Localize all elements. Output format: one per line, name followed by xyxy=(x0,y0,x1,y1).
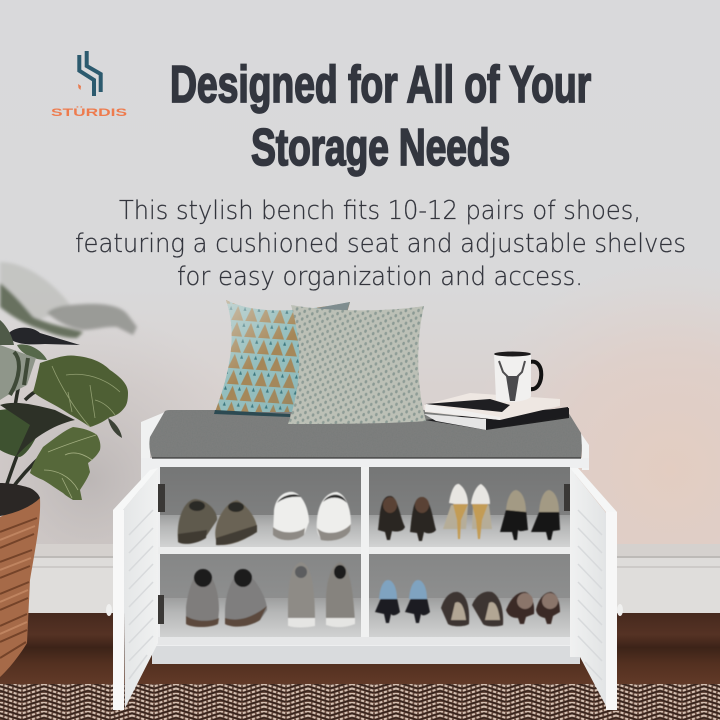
floor xyxy=(0,613,720,685)
title: Storage Needs xyxy=(251,118,510,176)
title: Designed for All of Your xyxy=(170,55,591,113)
mug xyxy=(494,352,541,402)
books xyxy=(424,393,569,430)
shoe: cream and gold heels xyxy=(443,484,492,539)
logo wordmark: STÜRDIS xyxy=(51,106,127,119)
rug xyxy=(0,684,720,720)
shoe: brown pair xyxy=(178,499,257,545)
pillow: speckled xyxy=(288,305,426,424)
door knobs xyxy=(106,604,623,616)
icon: big fiddle leaf xyxy=(33,355,128,427)
right door xyxy=(570,468,617,710)
description text: for easy organization and access. xyxy=(177,262,583,292)
title xyxy=(170,55,591,176)
icon: logo accent xyxy=(78,84,81,90)
baseboard xyxy=(28,544,720,614)
shoe: blue heels xyxy=(375,580,430,623)
left door xyxy=(113,468,158,710)
logo xyxy=(51,51,127,119)
plinth xyxy=(152,644,580,664)
bench frame xyxy=(141,412,589,646)
icon: faded upper leaves xyxy=(0,262,137,338)
description text: This stylish bench fits 10-12 pairs of shoes, xyxy=(119,196,641,226)
shoes: lower right xyxy=(375,580,560,626)
description text xyxy=(75,196,686,292)
icon: middle fiddle leaf xyxy=(30,427,100,500)
shoe: sneaker pair xyxy=(288,562,355,628)
pillow: patterned xyxy=(214,300,350,417)
shoes: lower left xyxy=(186,562,355,628)
shoes: upper right xyxy=(378,484,560,541)
shoe: bronze pair xyxy=(441,592,503,626)
icon: dark left leaf xyxy=(0,409,38,457)
icon: dark bud and small leaves xyxy=(7,328,80,345)
shoe: white pair xyxy=(273,492,351,541)
shoe: taupe pair xyxy=(506,592,560,624)
shoes: upper left xyxy=(178,492,351,545)
plant xyxy=(0,262,137,677)
icon: stems xyxy=(0,350,70,505)
left compartment xyxy=(157,467,362,638)
icon: wicker pot xyxy=(0,483,40,677)
centre divider xyxy=(361,467,369,639)
shoe: metallic and black heels xyxy=(500,490,560,540)
description text: featuring a cushioned seat and adjustable shelves xyxy=(75,229,686,259)
icon: dark shadow leaf xyxy=(0,403,75,458)
shoe: dark heels xyxy=(378,496,436,541)
right compartment xyxy=(368,467,572,638)
hinges xyxy=(157,484,574,624)
icon: logo mark xyxy=(79,51,101,96)
cushion xyxy=(149,410,582,458)
shoe: grey pair xyxy=(186,569,267,627)
bottom shelf edge xyxy=(155,637,578,645)
bench xyxy=(106,410,623,710)
